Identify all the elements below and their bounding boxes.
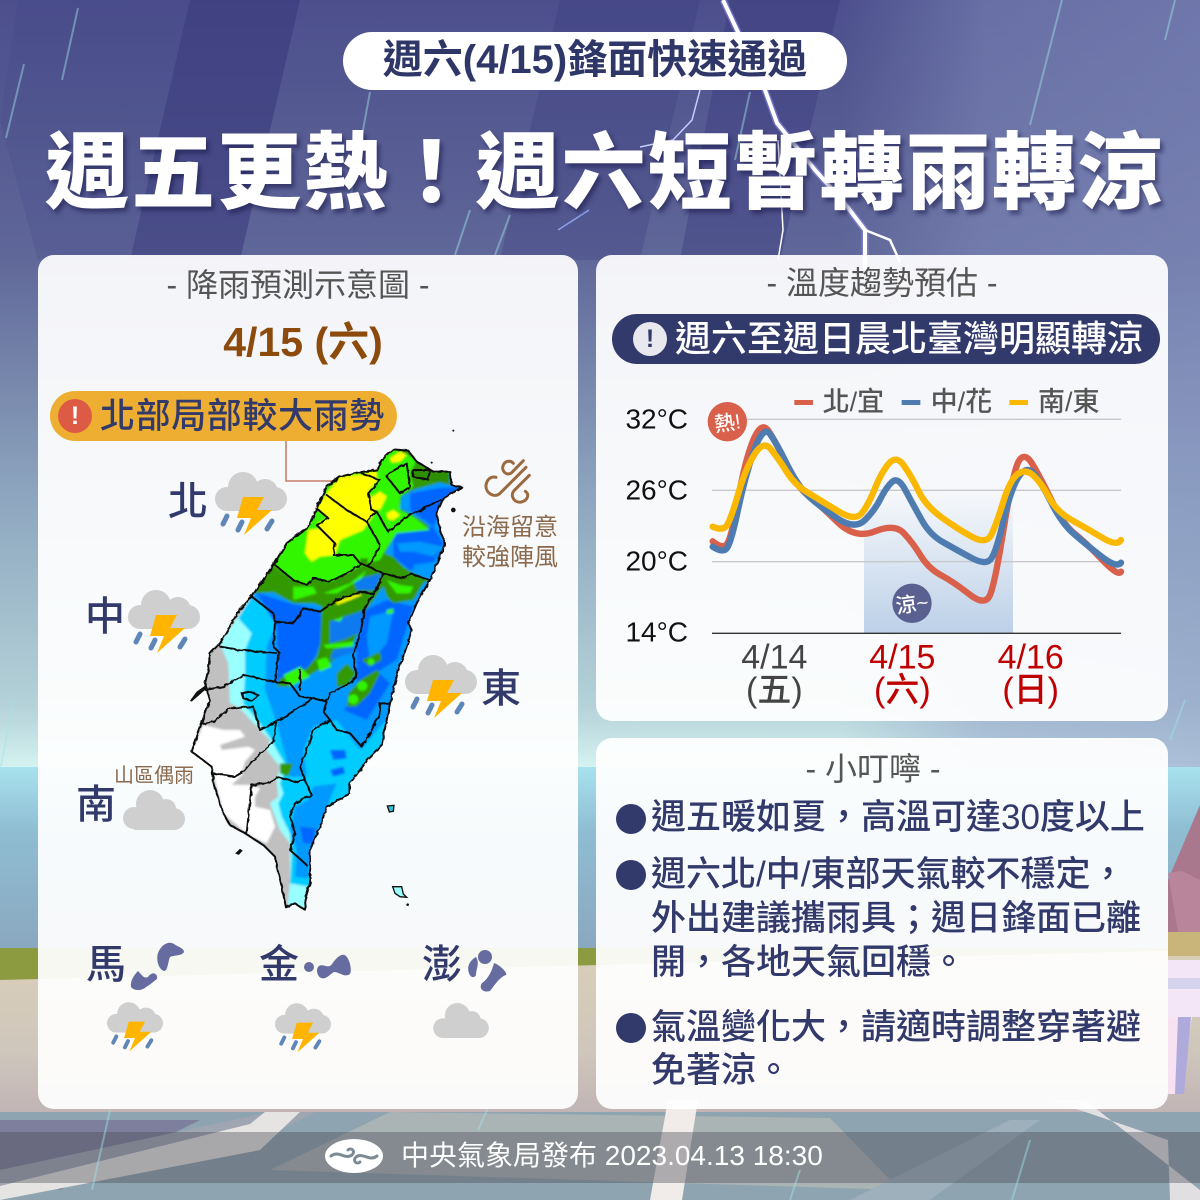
label: Penghu: 澎 <box>422 943 462 987</box>
right side rock <box>1168 805 1200 932</box>
tip 2 text: 開，各地天氣回穩。 <box>651 943 966 982</box>
icon: exclamation <box>633 322 667 356</box>
lightning <box>723 0 865 270</box>
tip 2 text: 外出建議攜雨具；週日鋒面已離 <box>651 899 1141 938</box>
heading: rain forecast: - 降雨預測示意圖 - <box>166 267 430 303</box>
label: Matsu: 馬 <box>86 943 126 987</box>
x axis dates: 4/14 <box>741 639 807 677</box>
y axis labels: 20°C <box>625 545 688 576</box>
legend <box>794 387 1100 417</box>
callout text: 北部局部較大雨勢 <box>100 397 385 436</box>
icon: agency logo <box>325 1139 383 1173</box>
badge: hot <box>708 402 747 441</box>
x axis dates: 4/15 <box>869 639 935 677</box>
legend: 南/東 <box>1038 387 1100 417</box>
bullet <box>616 860 646 890</box>
icon: cloud Penghu <box>433 1003 489 1038</box>
tip 1 <box>616 798 1145 837</box>
banner: cooling alert <box>612 314 1160 364</box>
label: south: 南 <box>76 783 116 827</box>
bottom ground <box>0 1112 1200 1200</box>
banner text: 週六至週日晨北臺灣明顯轉涼 <box>675 318 1143 359</box>
icon: Penghu islands <box>468 950 506 992</box>
map of Taiwan rainfall <box>190 430 464 911</box>
x axis dates: (六) <box>874 672 931 710</box>
label: north: 北 <box>168 480 208 524</box>
bullet <box>616 1013 646 1043</box>
series: north/Yilan <box>713 427 1121 601</box>
badge: cool <box>892 584 932 623</box>
icon: thunderstorm east <box>405 655 477 718</box>
tip 3 text: 免著涼。 <box>651 1051 791 1090</box>
label: east: 東 <box>481 667 521 711</box>
bullet <box>616 804 646 834</box>
y axis labels <box>625 403 688 647</box>
cool period shading <box>864 490 1013 633</box>
tip 2 text: 週六北/中/東部天氣較不穩定， <box>651 855 1125 894</box>
icon: exclamation <box>58 399 92 433</box>
note: coastal winds: 較強陣風 <box>462 544 558 571</box>
tip 1 text: 週五暖如夏，高溫可達30度以上 <box>651 798 1145 837</box>
title: 週五更熱！週六短暫轉雨轉涼 <box>45 126 1164 220</box>
y axis labels: 14°C <box>625 616 688 647</box>
note: coastal winds: 沿海留意 <box>462 514 558 541</box>
series: central/Hualien <box>713 432 1121 565</box>
date label: 4/15 (六) <box>223 319 383 365</box>
icon: thunderstorm Matsu <box>107 1002 163 1052</box>
icon: strong wind <box>484 459 531 504</box>
tip 3 text: 氣溫變化大，請適時調整穿著避 <box>651 1008 1141 1047</box>
legend: 北/宜 <box>823 387 884 417</box>
heading: tips: - 小叮嚀 - <box>805 751 941 787</box>
note: coastal winds <box>462 514 558 571</box>
x axis dates: 4/16 <box>998 639 1064 677</box>
legend: 中/花 <box>931 387 992 417</box>
icon: Kinmen islands <box>304 954 351 978</box>
callout: northern heavy rain <box>50 391 397 441</box>
label: Kinmen: 金 <box>259 943 299 987</box>
icon: thunderstorm Kinmen <box>275 1003 331 1052</box>
subtitle pill: 週六(4/15)鋒面快速通過 <box>383 38 807 82</box>
panel: temperature trend <box>596 255 1168 721</box>
icon: exclamation: ! <box>646 325 654 353</box>
footer: publisher <box>325 1139 823 1173</box>
footer text: 中央氣象局發布 2023.04.13 18:30 <box>401 1140 823 1171</box>
label: central: 中 <box>85 595 125 639</box>
icon: Matsu islands <box>130 942 184 990</box>
icon: thunderstorm north <box>215 472 287 535</box>
badge: cool: 涼~ <box>894 591 930 618</box>
icon: thunderstorm central <box>128 590 200 653</box>
y axis labels: 26°C <box>625 474 688 505</box>
x axis dates: (五) <box>746 672 803 710</box>
series: south/Taitung <box>713 446 1121 543</box>
connector line <box>285 441 332 482</box>
tip 3 <box>616 1008 1141 1090</box>
line chart <box>625 387 1124 710</box>
subtitle pill <box>343 32 847 90</box>
x axis dates: (日) <box>1002 672 1059 710</box>
x axis dates <box>741 639 1064 710</box>
note: mountain showers: 山區偶雨 <box>114 765 194 787</box>
heading: temperature trend: - 溫度趨勢預估 - <box>766 265 998 301</box>
icon: exclamation: ! <box>71 402 79 430</box>
y axis labels: 32°C <box>625 403 688 434</box>
tip 2 <box>616 855 1141 982</box>
panel: rain forecast map <box>38 255 578 1109</box>
tip 3 text <box>651 1008 1141 1090</box>
icon: cloud south <box>123 790 185 830</box>
panel: tips <box>596 738 1168 1109</box>
tip 2 text <box>651 855 1141 982</box>
badge: hot: 熱! <box>713 410 742 437</box>
